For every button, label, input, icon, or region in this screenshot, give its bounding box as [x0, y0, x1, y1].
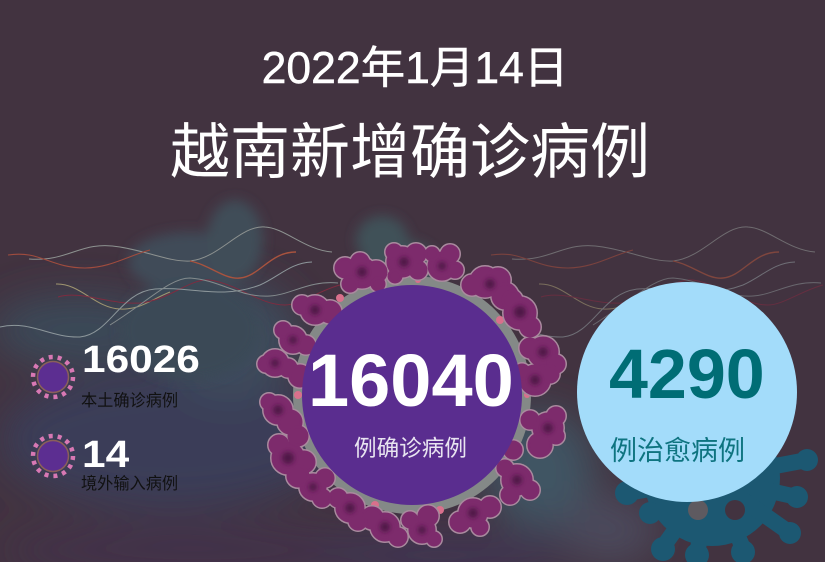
stat: recovered label: 例治愈病例: [610, 436, 745, 466]
stat: local cases label: 本土确诊病例: [81, 392, 178, 410]
stat: imported cases label: 境外输入病例: [81, 475, 178, 493]
icon: recovered teal virus: [615, 410, 818, 562]
stat: imported cases number: 14: [82, 434, 129, 476]
icon: large coronavirus: [259, 245, 564, 545]
stat: confirmed label: 例确诊病例: [354, 436, 467, 461]
stat: recovered number: 4290: [609, 335, 765, 413]
icon: small virus imported cases: [33, 436, 73, 476]
title: 越南新增确诊病例: [170, 119, 650, 186]
panel: confirmed cases circle: [302, 285, 522, 505]
wavy lines left: [0, 227, 340, 337]
stat: local cases number: 16026: [82, 339, 200, 381]
icon: small virus local cases: [33, 357, 73, 397]
stat: confirmed number: 16040: [308, 339, 514, 422]
date heading: 2022年1月14日: [262, 44, 568, 93]
panel: recovered cases circle: [577, 282, 797, 502]
wavy lines right: [483, 227, 823, 337]
